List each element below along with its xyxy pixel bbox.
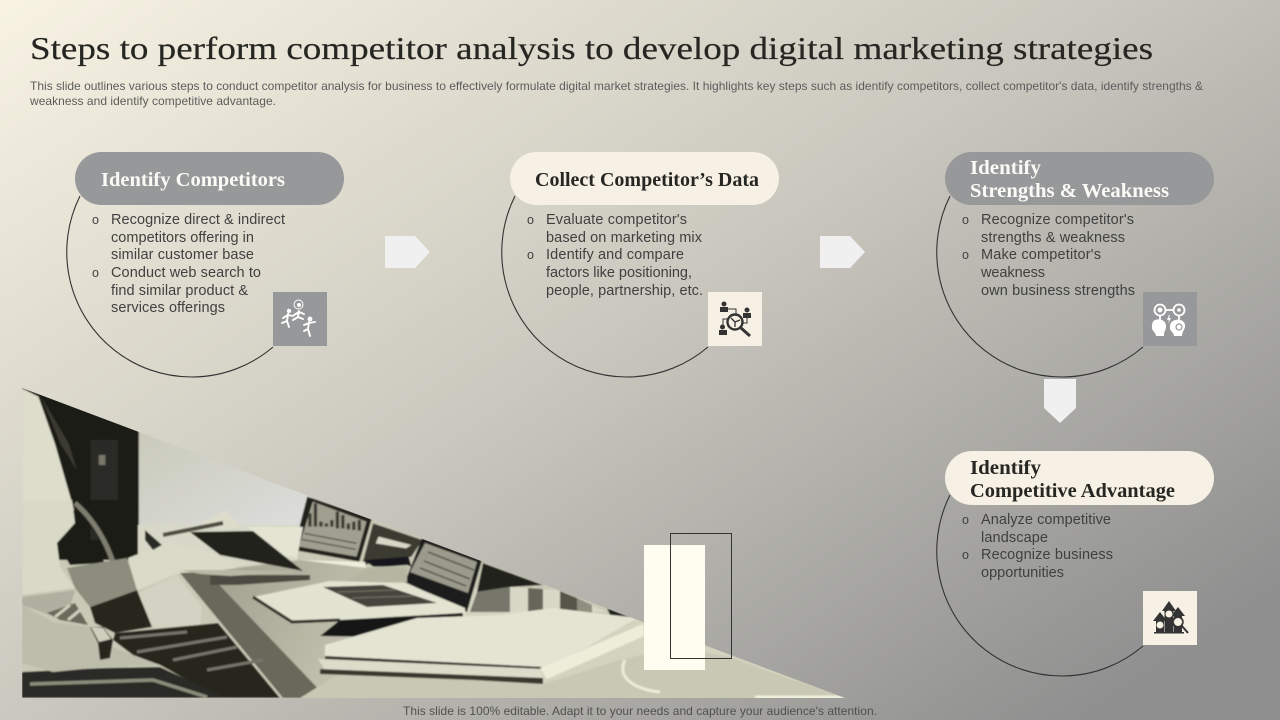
card arc — [67, 196, 273, 377]
torso — [22, 500, 75, 595]
bullet list: find similar product & — [111, 283, 248, 299]
card arc — [502, 196, 708, 377]
bullet list: Evaluate competitor's — [546, 212, 687, 228]
cloth — [300, 653, 833, 698]
striped box — [510, 587, 607, 613]
front laptop — [253, 581, 465, 622]
bullet list: people, partnership, etc. — [546, 283, 703, 299]
bullet list: own business strengths — [981, 283, 1135, 299]
icon: data search — [708, 292, 762, 346]
decorative rectangle: outline — [670, 534, 732, 658]
panel: identify competitors — [67, 152, 344, 377]
icon: strengths heads — [1143, 292, 1197, 346]
icon: running competitors — [273, 292, 327, 346]
screen two — [405, 538, 482, 612]
title: Steps to perform competitor analysis to develop digital marketing strategies — [30, 30, 1153, 66]
heading pill: Competitive Advantage — [970, 480, 1175, 502]
photo: laptops on desk — [22, 385, 852, 700]
heading pill: Identify Competitors — [101, 169, 285, 191]
back book — [306, 560, 366, 568]
lap and shirt — [47, 603, 88, 625]
arrow: step 1 to 2 — [385, 236, 430, 268]
tablet — [190, 531, 303, 571]
description text: weakness and identify competitive advantage. — [29, 94, 276, 108]
bullet list: Recognize direct & indirect — [111, 212, 285, 228]
card arc — [937, 495, 1143, 676]
background right — [477, 563, 543, 592]
heading pill: Identify — [970, 157, 1042, 179]
heading pill: Identify — [970, 457, 1042, 479]
sleeve and hand — [67, 558, 137, 607]
chair — [90, 500, 118, 540]
bullet list: based on marketing mix — [546, 230, 703, 246]
heading pill — [945, 451, 1214, 505]
bullet list: services offerings — [111, 300, 225, 316]
bullet list — [92, 212, 285, 316]
bullet list: opportunities — [981, 565, 1064, 581]
wall lower — [138, 525, 300, 590]
description text — [29, 79, 1203, 108]
heading pill — [945, 152, 1214, 205]
bullet list: similar customer base — [111, 247, 254, 263]
bullet list — [962, 212, 1135, 299]
bullet list: competitors offering in — [111, 230, 254, 246]
icon: rising arrows — [1143, 591, 1197, 645]
heading pill — [75, 152, 344, 205]
bullet list: landscape — [981, 530, 1048, 546]
bullet list: strengths & weakness — [981, 230, 1125, 246]
decorative rectangle: solid — [644, 545, 705, 670]
notebooks — [325, 608, 637, 667]
bullet list: o — [527, 213, 534, 227]
footer note: This slide is 100% editable. Adapt it to your needs and capture your audience's attention. — [403, 704, 877, 718]
bullet list: Identify and compare — [546, 247, 684, 263]
heading pill: Collect Competitor’s Data — [535, 169, 759, 191]
description text: This slide outlines various steps to conduct competitor analysis for business to effectively formulate digital market strategies. It highlights key steps such as identify competitors, collect competitor's data, identify strengths & — [30, 79, 1203, 93]
bullet list: factors like positioning, — [546, 265, 692, 281]
bullet list: o — [962, 213, 969, 227]
table — [220, 560, 782, 686]
panel: identify strengths and weakness — [937, 152, 1214, 377]
forearm and watch — [22, 605, 160, 672]
bullet list: Recognize business — [981, 547, 1113, 563]
bullet list: Recognize competitor's — [981, 212, 1134, 228]
panel: identify competitive advantage — [937, 451, 1214, 676]
bullet list: o — [92, 213, 99, 227]
bullet list: weakness — [980, 265, 1045, 281]
panel: collect competitor's data — [502, 152, 779, 377]
heading pill: Strengths & Weakness — [970, 180, 1169, 202]
bullet list — [527, 212, 703, 299]
phone — [320, 613, 463, 637]
arrow: step 2 to 3 — [820, 236, 865, 268]
heading pill — [510, 152, 779, 205]
bullet list: o — [527, 248, 534, 262]
bullet list: o — [962, 548, 969, 562]
bullet list: o — [962, 513, 969, 527]
bullet list: Analyze competitive — [981, 512, 1111, 528]
arrow: step 3 to 4 — [1044, 379, 1076, 423]
bullet list — [962, 512, 1113, 581]
card arc — [937, 196, 1143, 377]
bullet list: Make competitor's — [981, 247, 1101, 263]
bullet list: Conduct web search to — [111, 265, 261, 281]
bullet list: o — [92, 266, 99, 280]
bullet list: o — [962, 248, 969, 262]
